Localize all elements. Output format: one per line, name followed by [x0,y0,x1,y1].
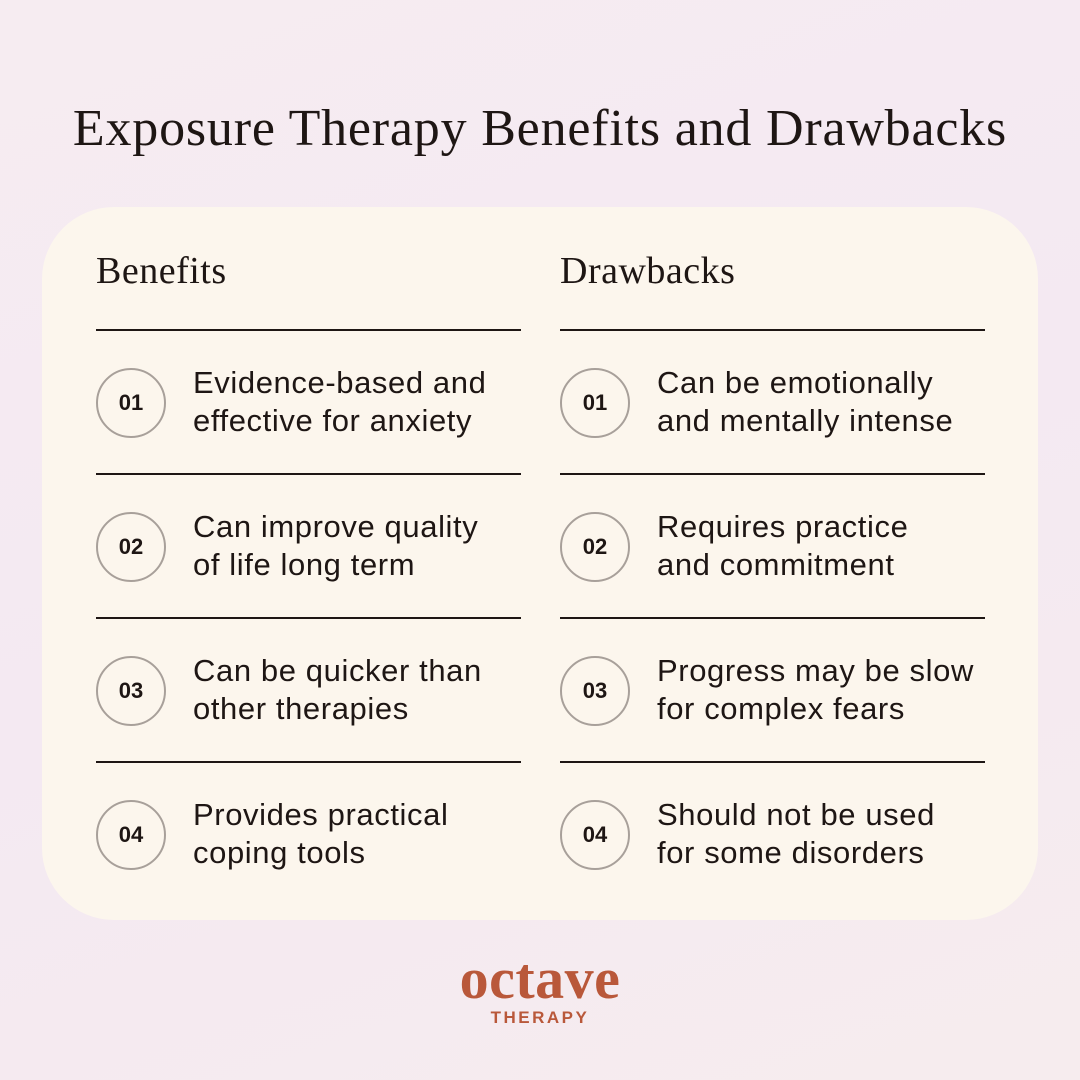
item: drawback 03: for complex fears [657,691,905,726]
item: benefit 04: coping tools [193,835,366,870]
item: drawback 01: 01 [583,390,607,415]
item: drawback 02 [560,509,908,582]
item: benefit 02: 02 [119,534,143,559]
panel: main card [42,207,1038,920]
item: benefit 03: 03 [119,678,143,703]
item: drawback 01 [560,365,953,438]
item: drawback 01: and mentally intense [657,403,953,438]
item: benefit 01: Evidence-based and [193,365,486,400]
item: benefit 01: effective for anxiety [193,403,472,438]
item: drawback 04: 04 [583,822,607,847]
item: benefit 02: of life long term [193,547,415,582]
item: benefit 01: 01 [119,390,143,415]
item: benefit 02: Can improve quality [193,509,478,544]
item: benefit 04 [96,797,448,870]
item: drawback 01: Can be emotionally [657,365,933,400]
item: drawback 03 [560,653,974,726]
heading: benefits: Benefits [96,250,227,292]
panel: drawbacks [560,250,985,870]
item: drawback 04: Should not be used [657,797,935,832]
item: drawback 03: 03 [583,678,607,703]
item: drawback 02: 02 [583,534,607,559]
item: benefit 04: 04 [119,822,143,847]
item: drawback 02: Requires practice [657,509,908,544]
logo: octave [460,946,620,1011]
logo: THERAPY [491,1008,589,1027]
item: benefit 04: Provides practical [193,797,448,832]
item: benefit 03 [96,653,482,726]
item: drawback 03: Progress may be slow [657,653,974,688]
heading: drawbacks: Drawbacks [560,250,735,292]
item: benefit 01 [96,365,486,438]
item: drawback 04 [560,797,935,870]
item: benefit 03: other therapies [193,691,409,726]
item: benefit 03: Can be quicker than [193,653,482,688]
item: drawback 02: and commitment [657,547,895,582]
item: benefit 02 [96,509,478,582]
panel: benefits [96,250,521,870]
item: drawback 04: for some disorders [657,835,925,870]
title: Exposure Therapy Benefits and Drawbacks [73,100,1007,157]
